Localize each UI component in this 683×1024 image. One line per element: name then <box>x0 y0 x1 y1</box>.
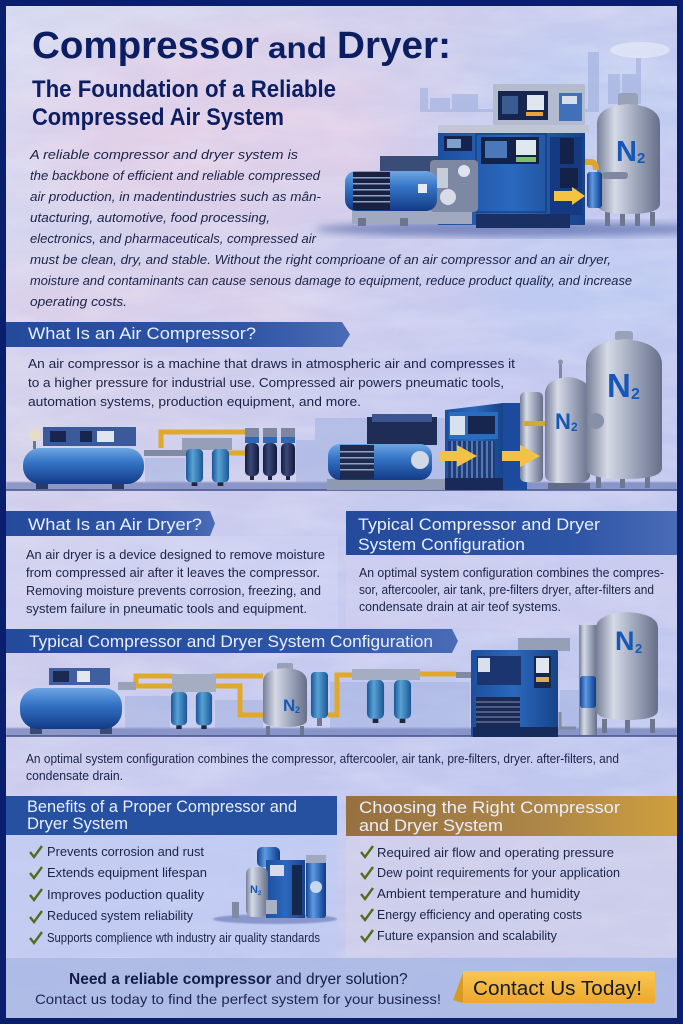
choosing checklist: Energy efficiency and operating costs <box>377 907 582 922</box>
benefits checklist <box>30 844 320 945</box>
icon: medium N2 tank: 2 <box>571 420 578 434</box>
arrow: yellow <box>440 445 477 467</box>
icon: small N2 tank: 2 <box>295 705 300 715</box>
title <box>32 25 451 67</box>
equipment line illustration 1 <box>6 331 677 491</box>
icon: equipment cluster: 2 <box>258 891 262 897</box>
intro paragraph: A reliable compressor and dryer system is <box>29 147 299 162</box>
call to action text: Need a reliable compressor and dryer solution? <box>69 971 408 988</box>
icon: equipment cluster: N <box>250 884 258 896</box>
call to action band <box>6 958 677 1018</box>
air dryer text: from compressed air after it leaves the compressor. <box>26 565 320 580</box>
icon: large N2 tank <box>586 331 662 488</box>
configuration summary text: An optimal system configuration combines the compressor, aftercooler, air tank, pre-filters, dryer. after-filters, and <box>26 751 619 766</box>
banner: what is an air dryer: What Is an Air Dryer? <box>28 515 202 534</box>
icon: motor <box>345 156 478 226</box>
benefits checklist: Reduced system reliability <box>47 908 193 923</box>
icon: dark filters <box>245 428 295 480</box>
air compressor paragraph: An air compressor is a machine that draws in atmospheric air and compresses it <box>28 356 515 371</box>
banner: choosing <box>346 796 677 836</box>
section banner: what is an air compressor: What Is an Air Compressor? <box>28 324 256 343</box>
icon: control box <box>493 84 585 125</box>
icon: equipment cluster <box>213 847 337 924</box>
air dryer text: Removing moisture prevents corrosion, freezing, and <box>26 583 321 598</box>
banner: choosing: Choosing the Right Compressor <box>359 798 620 817</box>
icon: filter pair <box>352 669 420 723</box>
equipment line illustration 2 <box>6 612 677 737</box>
icon: motor compressor <box>327 414 445 490</box>
icon: small N2 tank <box>263 663 307 735</box>
air dryer text <box>26 547 325 616</box>
benefits checklist: Prevents corrosion and rust <box>47 844 204 859</box>
title: and <box>268 32 327 65</box>
title: Dryer: <box>337 25 451 67</box>
banner: choosing: and Dryer System <box>359 816 503 835</box>
choosing checklist: Future expansion and scalability <box>377 928 557 943</box>
intro paragraph: electronics, and pharmaceuticals, compressed air <box>30 231 317 246</box>
intro paragraph: the backbone of efficient and reliable compressed <box>30 168 321 183</box>
hero illustration: factory skyline <box>420 42 670 112</box>
button: contact us today: Contact Us Today! <box>473 977 642 1000</box>
choosing checklist: Dew point requirements for your application <box>377 865 620 880</box>
benefits checklist: Supports complience wth industry air quality standards <box>47 930 320 945</box>
arrow: yellow <box>554 187 585 205</box>
icon: refrigerated dryer <box>445 403 527 490</box>
icon: medium N2 tank: N <box>555 409 571 434</box>
intro paragraph <box>29 147 632 309</box>
configuration summary text: condensate drain. <box>26 768 123 783</box>
banner: typical configuration: System Configuration <box>358 535 525 554</box>
subtitle: Compressed Air System <box>32 104 284 131</box>
benefits checklist: Extends equipment lifespan <box>47 865 207 880</box>
icon: N2 tank <box>597 93 660 226</box>
benefits checklist: Improves poduction quality <box>47 887 204 902</box>
button: contact us today <box>453 971 655 1003</box>
configuration text <box>359 565 664 614</box>
icon: large N2 tank: 2 <box>631 386 640 403</box>
configuration text: condensate drain at air teof systems. <box>359 599 561 614</box>
configuration text: An optimal system configuration combines the compres- <box>359 565 664 580</box>
icon: large N2 tank: 2 <box>635 641 642 656</box>
icon: medium N2 tank <box>545 360 590 489</box>
panel: benefits <box>6 796 337 957</box>
icon: filter pair <box>171 674 216 729</box>
panel: typical configuration <box>346 511 677 628</box>
intro paragraph: utacturing, automotive, food processing, <box>30 210 270 225</box>
intro paragraph: air production, in madentindustries such as mân- <box>30 189 322 204</box>
choosing checklist: Required air flow and operating pressure <box>377 845 614 860</box>
banner: benefits: Dryer System <box>27 814 128 833</box>
intro paragraph: must be clean, dry, and stable. Without the right comprioane of an air compressor and an air dryer, <box>30 252 611 267</box>
icon: inline filter <box>311 672 328 726</box>
icon: N2 tank: 2 <box>637 150 645 167</box>
air dryer text: An air dryer is a device designed to remove moisture <box>26 547 325 562</box>
air compressor paragraph <box>28 356 515 409</box>
intro paragraph: operating costs. <box>30 294 127 309</box>
subtitle: The Foundation of a Reliable <box>32 76 336 103</box>
air dryer text: system failure in pneumatic tools and equipment. <box>26 601 307 616</box>
icon: column and filter <box>560 625 622 735</box>
icon: large N2 tank: N <box>607 367 631 404</box>
icon: large N2 tank <box>596 612 658 733</box>
air compressor paragraph: automation systems, production equipment, and more. <box>28 394 361 409</box>
banner: what is an air dryer <box>6 511 215 536</box>
banner: typical configuration <box>346 511 677 555</box>
banner: typical configuration: Typical Compressor and Dryer <box>358 515 600 534</box>
configuration text: sor, aftercooler, air tank, pre-filters dryer, after-filters and <box>359 582 654 597</box>
call to action text: Contact us today to find the perfect system for your business! <box>35 991 441 1007</box>
hero illustration: compressor, dryer and N2 tank <box>315 84 683 237</box>
arrow: yellow <box>502 445 540 467</box>
configuration summary text <box>26 751 619 783</box>
icon: silver column <box>520 392 548 482</box>
title: Compressor <box>32 25 259 67</box>
icon: light blue filters <box>182 438 232 486</box>
panel: air dryer <box>6 511 338 628</box>
icon: refrigerated dryer <box>456 638 570 737</box>
icon: small N2 tank: N <box>283 696 295 715</box>
banner: benefits <box>6 796 337 835</box>
banner: benefits: Benefits of a Proper Compressor and <box>27 797 297 816</box>
subtitle <box>32 76 336 131</box>
icon: horizontal air tank <box>23 427 144 489</box>
intro paragraph: moisture and contaminants can cause senous damage to equipment, reduce product quality, and increase <box>30 273 632 288</box>
icon: large N2 tank: N <box>615 626 634 656</box>
icon: yellow pipework <box>135 674 456 715</box>
icon: blue compressor cabinet <box>438 125 589 228</box>
icon: pipework <box>144 432 246 453</box>
call to action text <box>35 971 441 1007</box>
air compressor paragraph: to a higher pressure for industrial use. Compressed air powers pneumatic tools, <box>28 375 504 390</box>
panel: choosing <box>346 796 677 957</box>
choosing checklist: Ambient temperature and humidity <box>377 886 581 901</box>
icon: N2 tank: N <box>616 136 637 168</box>
icon: inline filter <box>585 162 602 208</box>
icon: horizontal air tank <box>20 668 136 734</box>
section banner: what is an air compressor <box>6 322 350 347</box>
section banner: typical system configuration: Typical Compressor and Dryer System Configuration <box>29 632 433 651</box>
choosing checklist <box>361 845 620 943</box>
section banner: typical system configuration <box>6 629 458 653</box>
